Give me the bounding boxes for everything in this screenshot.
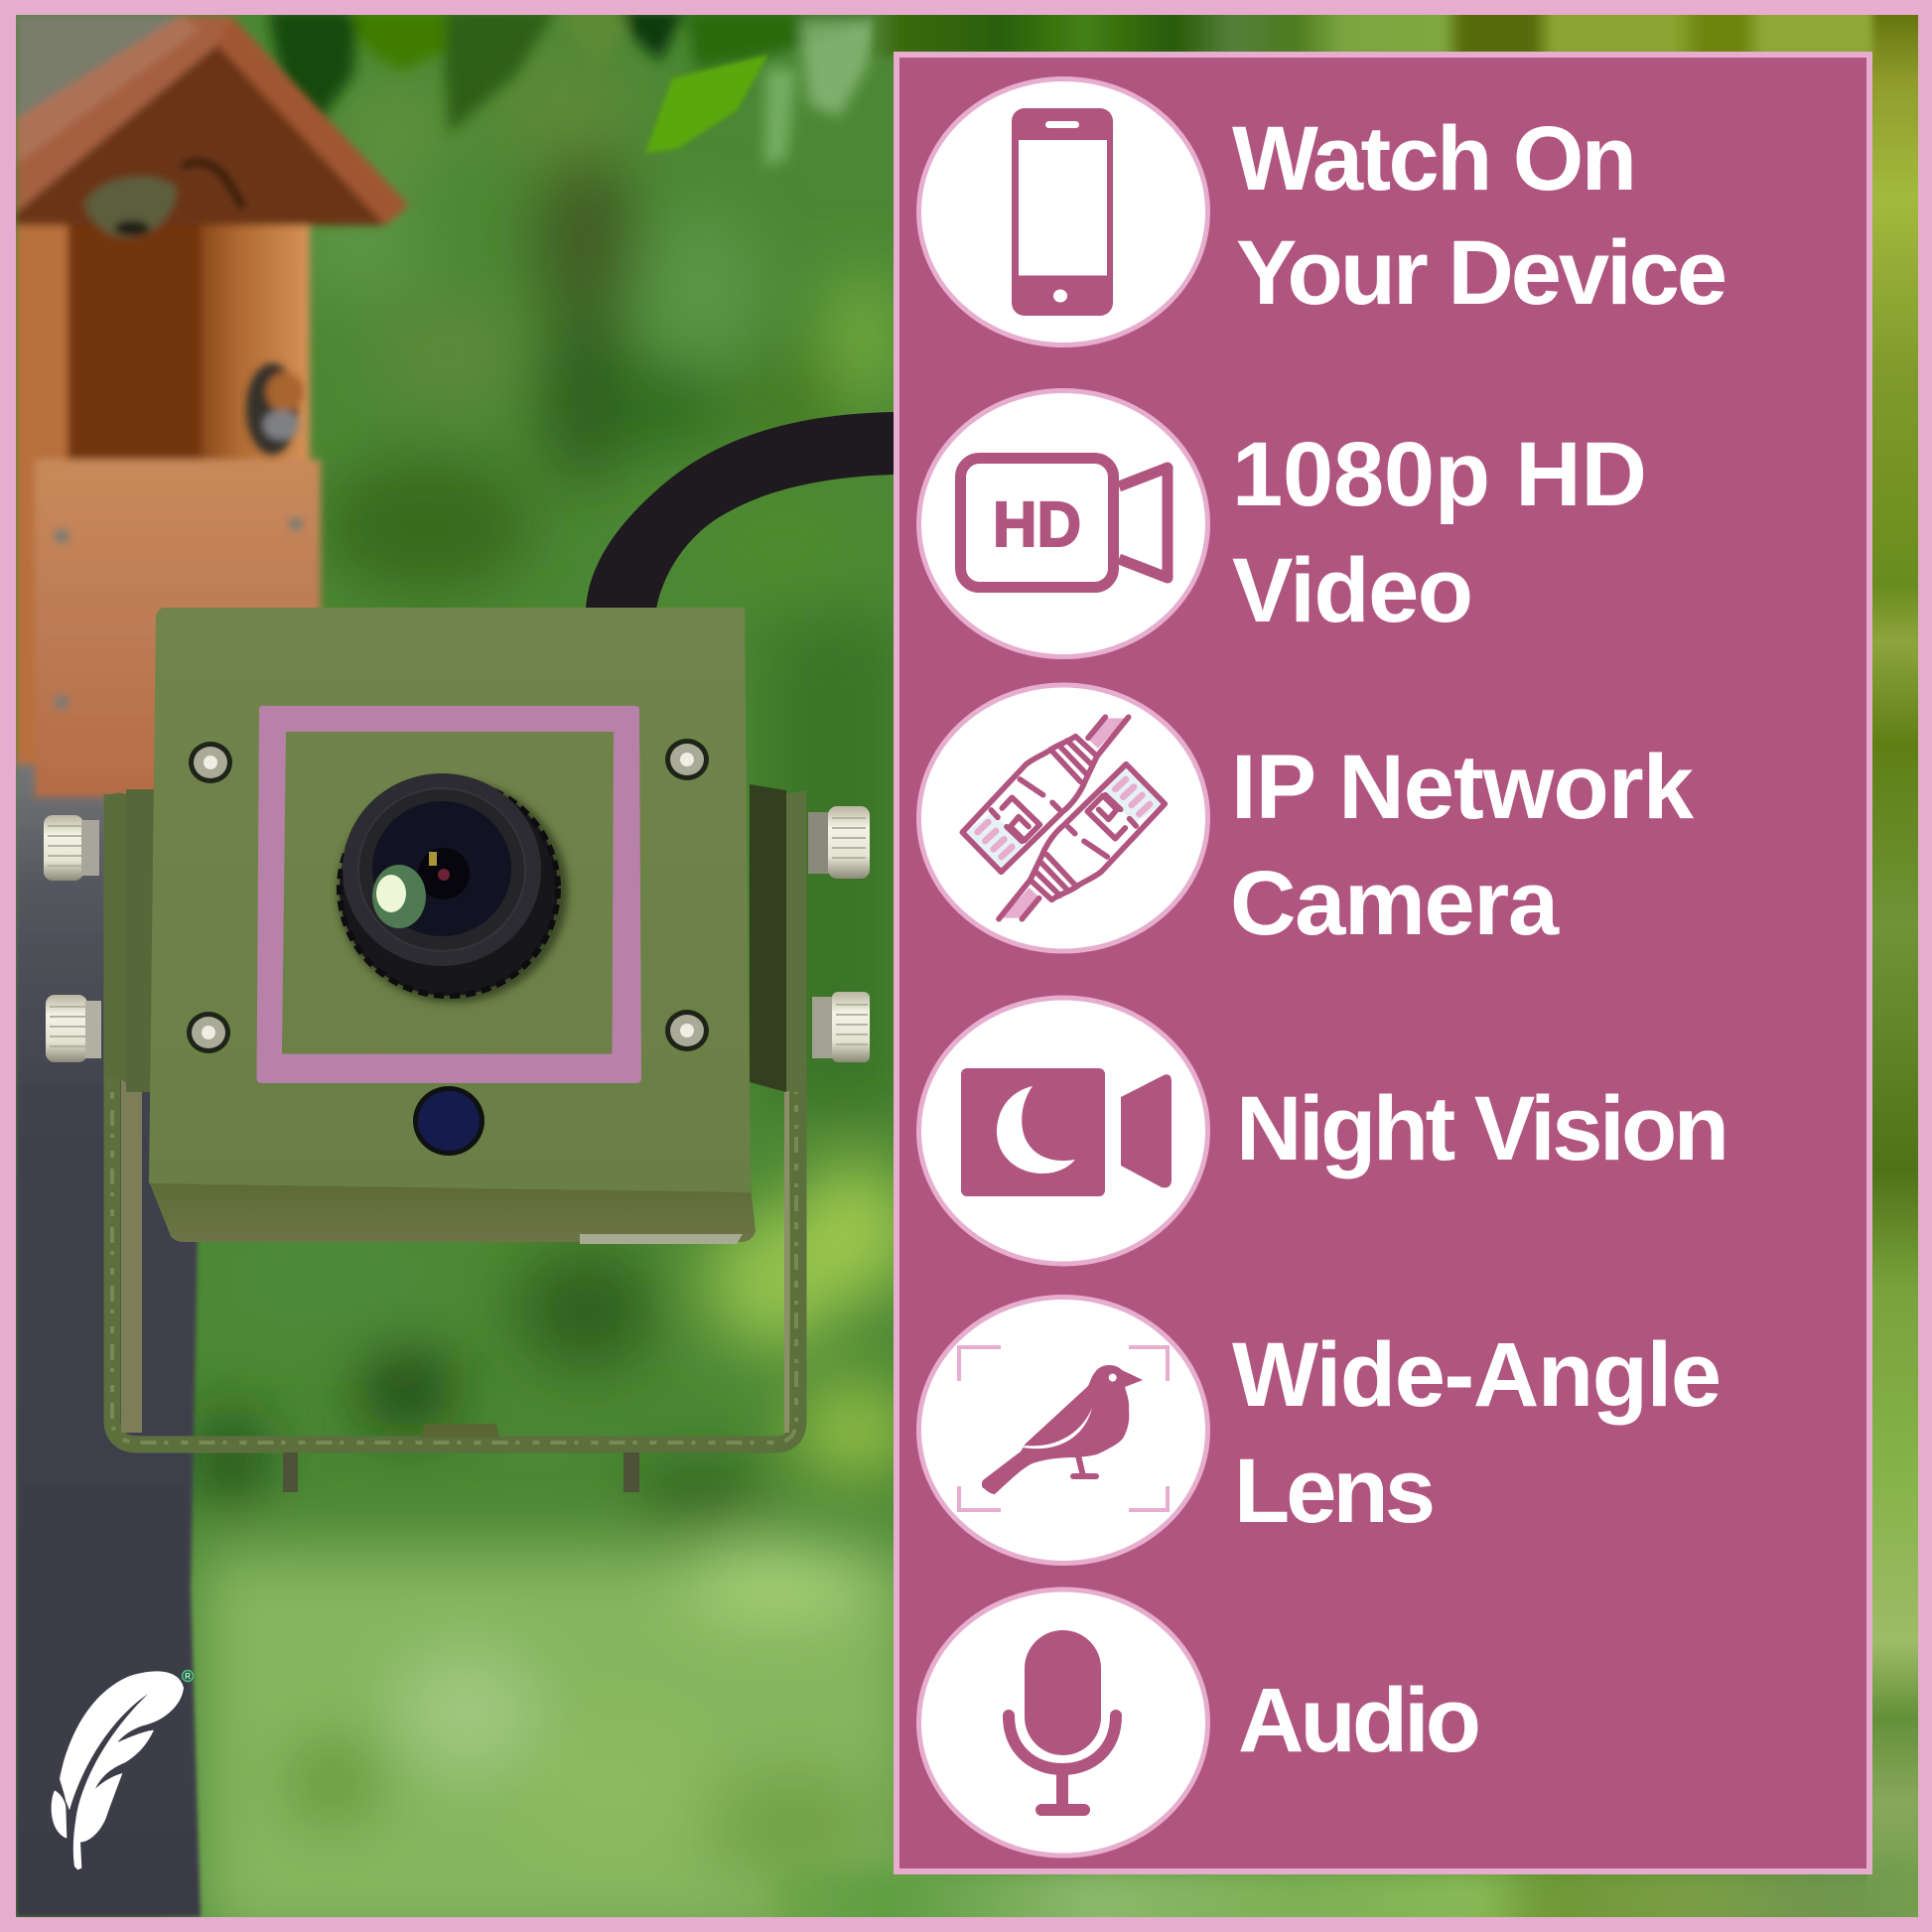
pink lens frame (256, 706, 641, 1083)
label (1230, 737, 1695, 954)
label: 1080p HD (1232, 424, 1647, 525)
infrared sensor (413, 1086, 484, 1156)
label (1232, 1324, 1722, 1542)
tree trunk (16, 755, 204, 1917)
label: Lens (1234, 1441, 1436, 1542)
canopy leaves (268, 10, 894, 167)
camera cable (586, 412, 894, 610)
foreground leaf (645, 55, 768, 153)
label: Your Device (1236, 222, 1727, 324)
side mounts (104, 784, 806, 1092)
thumb bolts (44, 806, 870, 1062)
birdhouse (16, 15, 409, 797)
bottom strip (774, 1866, 1932, 1932)
label: Audio (1238, 1670, 1481, 1771)
icon: HD video camera (961, 459, 1168, 588)
grey notch (580, 1234, 743, 1244)
screws (187, 739, 709, 1053)
top strip (874, 0, 1872, 57)
label: IP Network (1231, 737, 1695, 838)
label: Wide-Angle (1232, 1324, 1722, 1426)
label (1232, 108, 1727, 324)
label: Video (1232, 540, 1473, 641)
icon: smartphone (1012, 108, 1113, 316)
icon: night camera (961, 1068, 1172, 1196)
logo: feather: R (185, 1672, 191, 1681)
right strip (1866, 15, 1918, 1917)
logo: feather (52, 1670, 193, 1869)
panel: features (897, 55, 1869, 1871)
feature: wide-angle lens (919, 1297, 1722, 1563)
robin on birdhouse (246, 363, 304, 455)
icon: bird in viewfinder (959, 1347, 1168, 1510)
label (1232, 424, 1647, 641)
feature: 1080p HD video (919, 391, 1647, 657)
icon: HD video camera: HD (993, 488, 1081, 560)
label: Night Vision (1236, 1078, 1729, 1179)
feature: audio (919, 1589, 1481, 1856)
camera body underside (149, 1181, 756, 1242)
label: Watch On (1232, 108, 1637, 209)
lens (338, 773, 568, 1003)
icon: microphone (1009, 1630, 1116, 1816)
camera unit (44, 608, 870, 1492)
feature: IP network camera (919, 685, 1695, 954)
feature: night vision (919, 998, 1729, 1264)
mounting bracket (112, 794, 798, 1492)
camera front face (149, 608, 751, 1192)
label: Camera (1230, 853, 1560, 954)
icon: network cables (962, 717, 1165, 919)
feature: watch on your device (919, 79, 1727, 345)
